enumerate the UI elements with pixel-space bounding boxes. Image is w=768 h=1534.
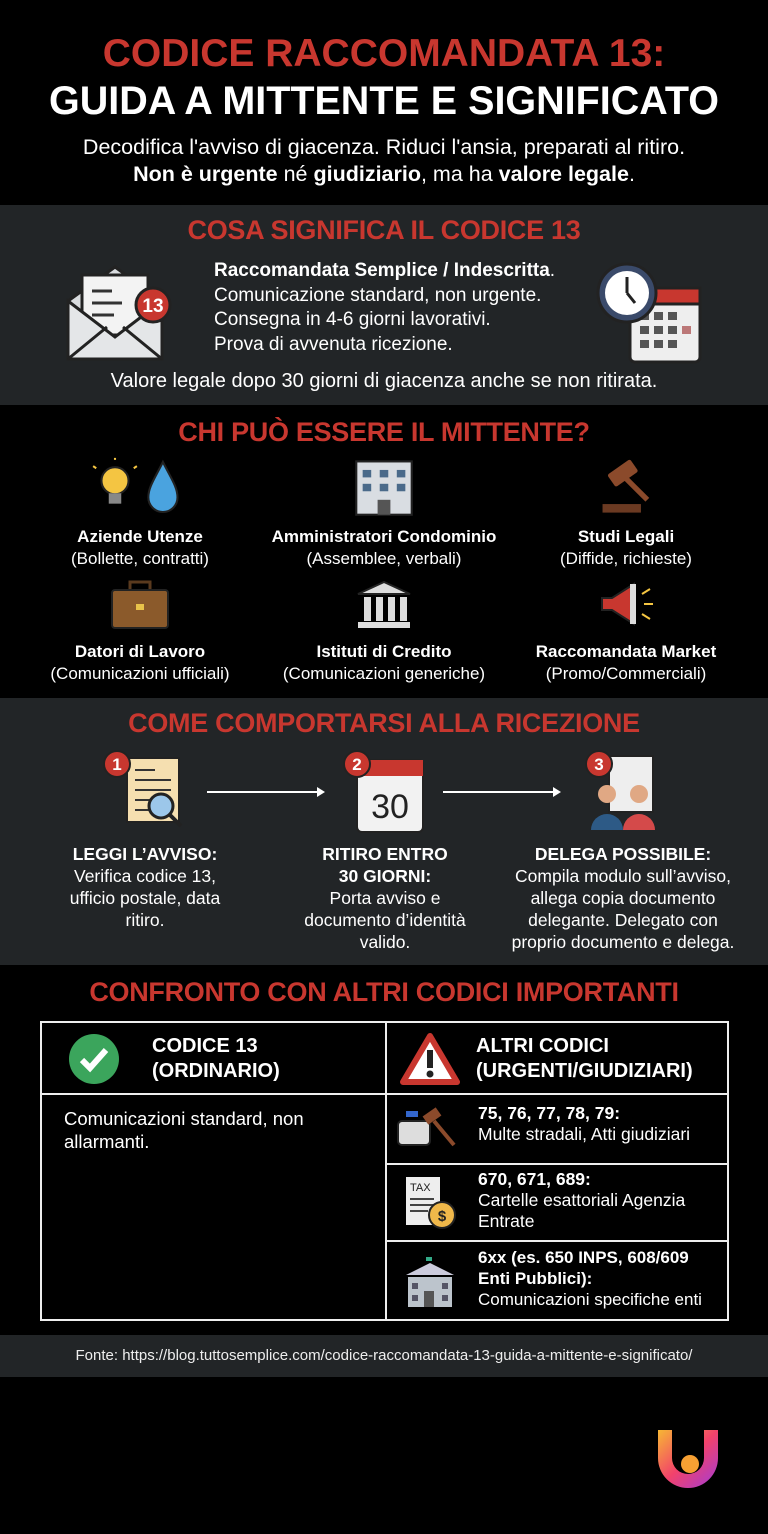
subtitle: Non è urgente né giudiziario, ma ha valore legale.	[133, 162, 635, 186]
row: multe: 75, 76, 77, 78, 79:	[478, 1103, 620, 1123]
step 3: Compila modulo sull’avviso,	[515, 866, 731, 886]
step 1: LEGGI L’AVVISO:	[73, 844, 217, 864]
item: datori	[50, 580, 230, 683]
subtitle	[83, 135, 685, 186]
step 3: 3	[594, 755, 604, 774]
item: studi legali: (Diffide, richieste)	[560, 549, 692, 568]
item: condominio: (Assemblee, verbali)	[307, 549, 461, 568]
step 3	[512, 752, 734, 952]
step 1: 1	[112, 755, 122, 774]
item: datori: (Comunicazioni ufficiali)	[50, 664, 230, 683]
step 2: 2	[352, 755, 362, 774]
title: GUIDA A MITTENTE E SIGNIFICATO	[49, 79, 719, 123]
step 1: ufficio postale, data	[70, 888, 220, 908]
item: condominio: Amministratori Condominio	[272, 527, 496, 546]
item: istituti credito: Istituti di Credito	[316, 642, 452, 661]
item: condominio	[272, 460, 496, 568]
icon: envelope 13: 13	[142, 296, 164, 317]
text block: Comunicazione standard, non urgente.	[214, 284, 541, 306]
left body text: allarmanti.	[64, 1131, 149, 1152]
item: market: (Promo/Commerciali)	[546, 664, 706, 683]
left body text	[64, 1108, 304, 1152]
note: Valore legale dopo 30 giorni di giacenza anche se non ritirata.	[111, 370, 657, 392]
item: studi legali: Studi Legali	[578, 527, 674, 546]
logo	[658, 1430, 718, 1488]
step 2: 30	[371, 788, 409, 826]
heading: confronto: CONFRONTO CON ALTRI CODICI IMPORTANTI	[89, 977, 679, 1007]
title	[49, 32, 719, 123]
table: confronto	[40, 1021, 729, 1321]
item: istituti credito: (Comunicazioni generiche)	[283, 664, 485, 683]
header left	[69, 1034, 280, 1084]
row: cartelle: 670, 671, 689:	[478, 1169, 591, 1189]
icon: clock calendar	[600, 266, 698, 360]
row: multe: Multe stradali, Atti giudiziari	[478, 1124, 690, 1144]
step 2	[304, 752, 466, 952]
header right: ALTRI CODICI	[476, 1035, 609, 1057]
footer source	[0, 1335, 768, 1377]
row: multe	[397, 1103, 690, 1146]
step 2: Porta avviso e	[330, 888, 440, 908]
step 3: delegante. Delegato con	[528, 910, 718, 930]
step 3: allega copia documento	[531, 888, 715, 908]
item: studi legali	[560, 460, 692, 568]
icon: envelope 13	[70, 269, 168, 358]
text block: Consegna in 4-6 giorni lavorativi.	[214, 309, 491, 330]
text block	[214, 260, 555, 354]
row: cartelle: $	[438, 1208, 447, 1225]
footer source: Fonte: https://blog.tuttosemplice.com/codice-raccomandata-13-guida-a-mittente-e-significato/	[76, 1347, 692, 1364]
header left: (ORDINARIO)	[152, 1060, 280, 1082]
row: cartelle	[406, 1169, 686, 1231]
left body text: Comunicazioni standard, non	[64, 1108, 304, 1129]
step 1: Verifica codice 13,	[74, 866, 216, 886]
title: CODICE RACCOMANDATA 13:	[103, 32, 665, 75]
item: datori: Datori di Lavoro	[75, 642, 205, 661]
subtitle: Decodifica l'avviso di giacenza. Riduci l'ansia, preparati al ritiro.	[83, 135, 685, 159]
step 1: ritiro.	[126, 910, 164, 930]
heading: COSA SIGNIFICA IL CODICE 13	[188, 215, 580, 245]
header left: CODICE 13	[152, 1035, 258, 1057]
step 2: documento d’identità	[304, 910, 466, 930]
panel: cosa significa	[0, 205, 768, 405]
text block: Raccomandata Semplice / Indescritta.	[214, 260, 555, 281]
item: market	[536, 582, 716, 683]
row: cartelle: TAX	[410, 1182, 431, 1194]
header right: (URGENTI/GIUDIZIARI)	[476, 1060, 693, 1082]
header right	[400, 1033, 693, 1085]
text block: Prova di avvenuta ricezione.	[214, 334, 453, 354]
arrow 1	[207, 787, 325, 797]
step 3: proprio documento e delega.	[512, 932, 734, 952]
arrow 2	[443, 787, 561, 797]
panel: mittente	[50, 417, 716, 683]
item: aziende utenze: Aziende Utenze	[77, 527, 203, 546]
row: enti	[406, 1248, 702, 1309]
row: enti: Enti Pubblici):	[478, 1269, 592, 1288]
heading: CHI PUÒ ESSERE IL MITTENTE?	[178, 417, 590, 447]
item: aziende utenze	[71, 458, 209, 568]
panel: come comportarsi	[0, 698, 768, 965]
step 1	[70, 752, 220, 930]
step 2: 30 GIORNI:	[339, 866, 431, 886]
row: enti: Comunicazioni specifiche enti	[478, 1290, 702, 1309]
step 3: DELEGA POSSIBILE:	[535, 844, 711, 864]
heading: COME COMPORTARSI ALLA RICEZIONE	[128, 708, 640, 738]
item: market: Raccomandata Market	[536, 642, 716, 661]
row: cartelle: Entrate	[478, 1211, 534, 1231]
row: cartelle: Cartelle esattoriali Agenzia	[478, 1190, 685, 1210]
item: aziende utenze: (Bollette, contratti)	[71, 549, 209, 568]
step 2: RITIRO ENTRO	[322, 844, 448, 864]
row: enti: 6xx (es. 650 INPS, 608/609	[478, 1248, 689, 1267]
step 2: valido.	[360, 932, 410, 952]
item: istituti credito	[283, 581, 485, 683]
